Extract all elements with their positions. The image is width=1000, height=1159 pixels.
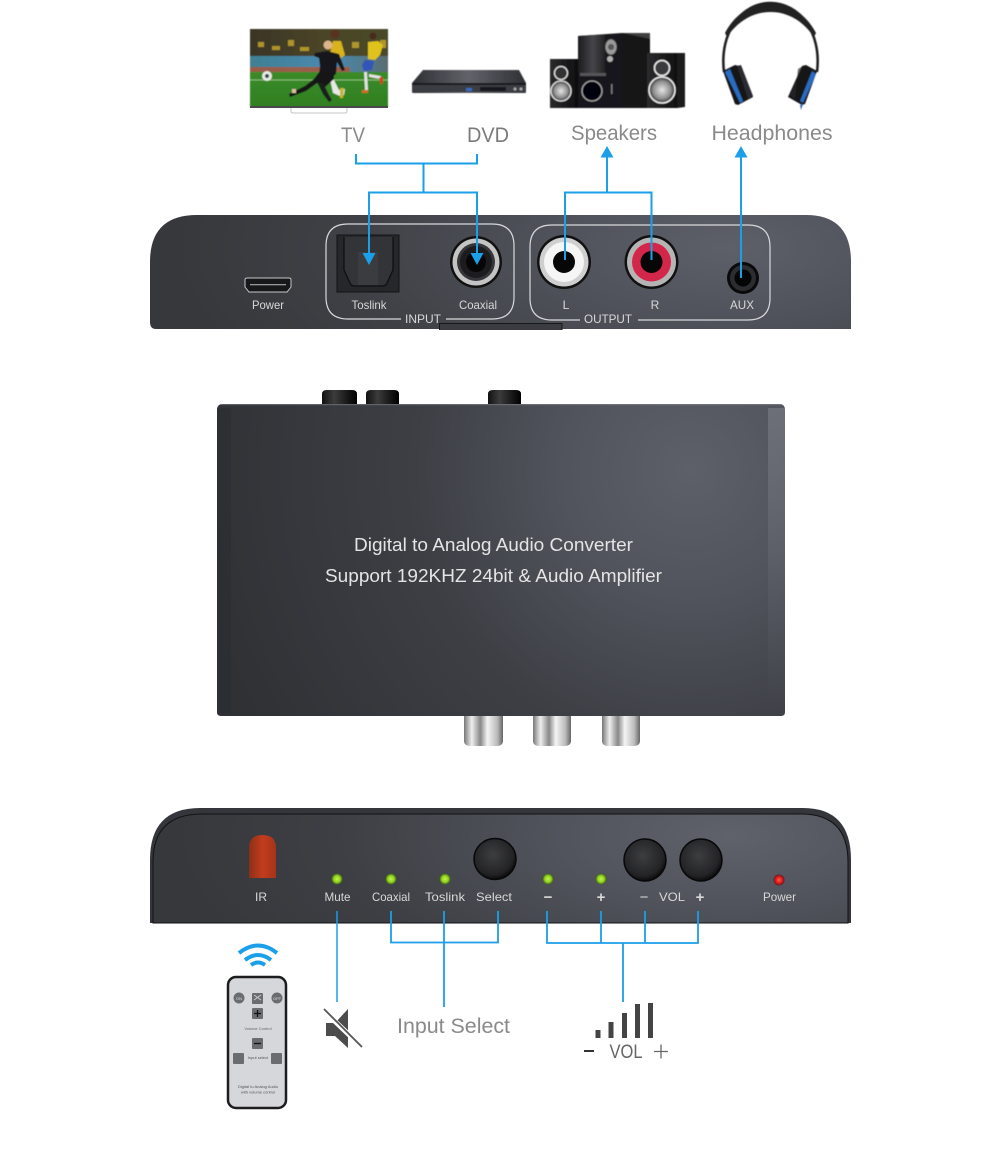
label: VOL: VOL: [610, 1042, 642, 1063]
icon: wifi signal: [239, 946, 277, 965]
IR window: [249, 835, 276, 878]
label: Coaxial: Coaxial: [459, 298, 497, 312]
icon: remote control: [228, 977, 286, 1108]
label: DVD: DVD: [467, 124, 509, 147]
front labels: −: [640, 889, 649, 906]
icon: TV: [250, 29, 388, 113]
label: INPUT: INPUT: [405, 312, 442, 326]
label: L: L: [563, 298, 570, 312]
remote text: description: [238, 1084, 279, 1094]
port: AUX: [727, 262, 759, 294]
front labels: +: [696, 889, 705, 906]
indicator LEDs: [332, 874, 784, 886]
remote text: description: Digital to Analog Audio: [238, 1084, 279, 1089]
front RCA plugs: [464, 716, 640, 746]
front labels: VOL: [659, 890, 685, 904]
volume up button: [252, 1008, 263, 1019]
arrows: outputs to speakers: [565, 146, 652, 260]
front labels: Power: [763, 890, 796, 904]
product text: Support 192KHZ 24bit & Audio Amplifier: [325, 566, 662, 586]
mute button: [252, 993, 263, 1004]
left cabinet: [550, 59, 578, 108]
remote text: volume: Volume Control: [244, 1026, 272, 1031]
front labels: Toslink: [425, 890, 466, 904]
label: Input Select: Input Select: [397, 1015, 510, 1038]
front labels: Coaxial: [372, 890, 410, 904]
icon: headphones: [723, 3, 818, 110]
input group outline: [326, 224, 514, 319]
icon: DVD player: [412, 70, 526, 93]
remote text: description: with volume control: [241, 1090, 275, 1094]
remote text: input select: Input select: [248, 1055, 269, 1060]
line: Mute to mute icon: [336, 911, 338, 1002]
product text: [325, 535, 662, 586]
label: Toslink: Toslink: [352, 298, 387, 312]
ON button: ON: [236, 996, 242, 1001]
bracket: volume: [547, 911, 698, 1002]
panel: rear of device: [150, 215, 851, 330]
label: Speakers: Speakers: [571, 122, 657, 145]
front labels: +: [597, 889, 606, 906]
label: Headphones: Headphones: [712, 122, 832, 145]
enclosure: [217, 404, 785, 716]
label: R: R: [651, 298, 660, 312]
front labels: [324, 889, 796, 906]
volume minus: [584, 1050, 594, 1052]
port: R: [624, 235, 678, 289]
label: IR: IR: [255, 890, 267, 904]
panel: device top view: [217, 390, 785, 746]
centre cabinet: [578, 33, 650, 108]
arrows: source devices to inputs: [356, 154, 484, 265]
product text: Digital to Analog Audio Converter: [354, 535, 633, 555]
front labels: Mute: [324, 890, 351, 904]
port: Coaxial: [450, 236, 502, 288]
rear knobs: [322, 390, 521, 405]
volume down button: [252, 1038, 263, 1049]
front labels: −: [544, 889, 553, 906]
bracket: input select: [391, 911, 498, 1007]
right player: [370, 32, 376, 40]
arrow: AUX to headphones: [734, 146, 748, 278]
slot at bottom edge: [440, 324, 562, 330]
OFF button: OFF: [273, 996, 282, 1001]
label: TV: TV: [341, 124, 365, 147]
panel: front of device: [150, 808, 851, 923]
right cabinet: [647, 53, 678, 108]
icon: speakers: [550, 33, 685, 108]
label: OUTPUT: OUTPUT: [584, 312, 633, 326]
buttons: [474, 838, 722, 881]
front labels: Select: [476, 890, 513, 904]
port: Toslink: [337, 235, 399, 292]
port: L: [537, 235, 591, 289]
back player: [330, 30, 340, 38]
coaxial and toslink buttons: [233, 1053, 282, 1064]
output group outline: [530, 225, 770, 320]
icon: muted speaker: [323, 1009, 363, 1048]
label: AUX: AUX: [730, 298, 754, 312]
port: micro USB power: [245, 278, 291, 292]
icon: volume bars: [596, 1003, 653, 1038]
volume plus: [654, 1044, 668, 1058]
ball: [262, 71, 272, 81]
label: Power: Power: [252, 298, 284, 312]
main player: [324, 40, 332, 50]
